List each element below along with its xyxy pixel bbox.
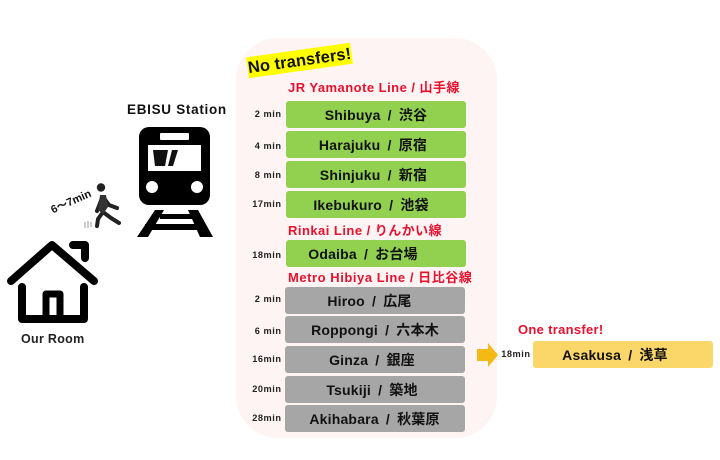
station: Roppongi: Roppongi / 六本木 <box>311 322 439 338</box>
time: Harajuku: 4 min <box>255 141 282 151</box>
heading: Metro Hibiya Line: Metro Hibiya Line / 日比谷線 <box>288 270 472 285</box>
station: Odaiba: Odaiba / お台場 <box>308 246 418 262</box>
station: Akihabara <box>285 405 465 432</box>
panel: no transfers background <box>236 38 497 438</box>
label: walking time: 6～7min <box>49 188 93 216</box>
station: Shinjuku: Shinjuku / 新宿 <box>320 167 427 183</box>
time: Tsukiji: 20min <box>252 384 282 394</box>
station: Ikebukuro: Ikebukuro / 池袋 <box>313 197 429 213</box>
station: Harajuku <box>286 131 466 158</box>
arrow: to Asakusa <box>477 343 498 367</box>
time: Akihabara: 28min <box>252 413 282 423</box>
station: Ikebukuro <box>286 191 466 218</box>
time: Hiroo: 2 min <box>255 294 282 304</box>
station: Ginza: Ginza / 銀座 <box>329 352 415 368</box>
heading: one transfer: One transfer! <box>518 322 604 337</box>
time: Roppongi: 6 min <box>255 326 282 336</box>
station: Akihabara: Akihabara / 秋葉原 <box>309 411 440 427</box>
station: Harajuku: Harajuku / 原宿 <box>319 137 427 153</box>
station: Tsukiji <box>285 376 465 403</box>
station: Shibuya: Shibuya / 渋谷 <box>325 107 427 123</box>
heading: Rinkai Line: Rinkai Line / りんかい線 <box>288 223 442 238</box>
icon: train <box>137 127 213 237</box>
time: Ikebukuro: 17min <box>252 199 282 209</box>
station: Hiroo: Hiroo / 広尾 <box>327 293 412 309</box>
station: Asakusa <box>533 341 713 368</box>
station: Shibuya <box>286 101 466 128</box>
time: Asakusa: 18min <box>501 349 530 359</box>
station: Roppongi <box>285 316 465 343</box>
label: our room: Our Room <box>21 332 85 346</box>
station: Odaiba <box>286 240 466 267</box>
station: Hiroo <box>285 287 465 314</box>
time: Ginza: 16min <box>252 354 282 364</box>
station: Tsukiji: Tsukiji / 築地 <box>326 382 418 398</box>
label: Ebisu Station: EBISU Station <box>127 102 227 117</box>
icon: walking person <box>84 183 122 228</box>
icon: house <box>7 241 98 323</box>
badge: no transfers: No transfers! <box>247 45 352 77</box>
time: Shinjuku: 8 min <box>255 170 282 180</box>
time: Shibuya: 2 min <box>255 109 282 119</box>
station: Asakusa: Asakusa / 浅草 <box>562 347 668 363</box>
station: Shinjuku <box>286 161 466 188</box>
heading: JR Yamanote Line: JR Yamanote Line / 山手線 <box>288 80 460 95</box>
time: Odaiba: 18min <box>252 250 282 260</box>
station: Ginza <box>285 346 465 373</box>
